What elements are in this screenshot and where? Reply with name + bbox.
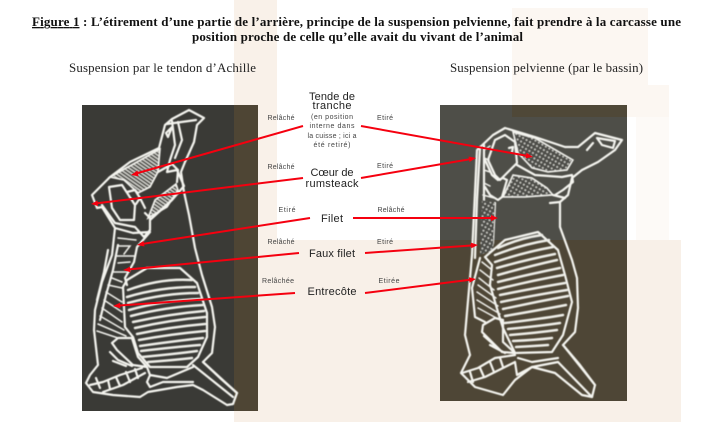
- label: Tende de tranche: été retiré): [314, 142, 350, 149]
- arrow: Tende de tranche to left carcass: [131, 126, 303, 176]
- hindquarter muscles: [110, 149, 160, 193]
- label: Cœur de rumsteack: [306, 167, 359, 190]
- heading: left column: Suspension par le tendon d’Achille: [69, 61, 256, 75]
- label: Tende de tranche: tranche: [312, 100, 352, 112]
- state labels: right column: Relâché: [378, 207, 405, 214]
- state labels: right column: [377, 115, 405, 285]
- arrow: Entrecôte to right carcass: [365, 277, 476, 293]
- forequarter and shank: [462, 318, 595, 397]
- state labels: right column: Etiré: [377, 239, 393, 246]
- state labels: left column: Etiré: [278, 207, 296, 214]
- label: Cœur de rumsteack: Cœur de: [310, 167, 354, 179]
- heading: right column: Suspension pelvienne (par le bassin): [450, 61, 643, 75]
- label: Tende de tranche: [308, 91, 357, 149]
- arrow: Filet to left carcass: [137, 218, 310, 246]
- spine: [475, 145, 495, 258]
- label: Tende de tranche: Tende de: [309, 91, 355, 103]
- label: Cœur de rumsteack: rumsteack: [306, 178, 359, 190]
- title: position proche de celle qu’elle avait du vivant de l’animal: [192, 29, 523, 44]
- arrow: Cœur de rumsteack to right carcass: [361, 156, 476, 178]
- state labels: left column: Relâchée: [262, 278, 294, 285]
- hind bones and inner lines: [102, 120, 196, 237]
- arrow: Faux filet to left carcass: [123, 253, 299, 272]
- carcass outline: [461, 128, 622, 397]
- label: Tende de tranche: la cuisse ; ici a: [308, 133, 357, 140]
- ribs: [495, 235, 568, 347]
- arrow: Faux filet to right carcass: [365, 243, 478, 253]
- rib cage: [472, 232, 572, 353]
- panel: left carcass, Achilles tendon suspension: [82, 105, 258, 411]
- carcass outline: [86, 110, 237, 405]
- state labels: right column: Etiré: [377, 163, 393, 170]
- state labels: right column: Etirée: [378, 278, 400, 285]
- state labels: left column: Relâché: [268, 115, 295, 122]
- state labels: left column: [262, 115, 296, 285]
- label: Entrecôte: Entrecôte: [308, 286, 356, 298]
- ribs: [127, 280, 205, 362]
- arrow: Filet to right carcass: [353, 215, 498, 221]
- label: Filet: Filet: [321, 213, 343, 225]
- hindquarter muscles: [513, 132, 573, 172]
- panel: right carcass, pelvic suspension: [440, 105, 627, 401]
- label: Tende de tranche: (en position: [311, 114, 353, 121]
- arrow: Entrecôte to left carcass: [113, 293, 295, 308]
- background watermark: [234, 0, 681, 422]
- rib cage: [123, 268, 207, 367]
- spine: [97, 228, 150, 320]
- title: [32, 14, 681, 44]
- forequarter and shank: [90, 338, 237, 397]
- label: Faux filet: Faux filet: [309, 248, 355, 260]
- arrow: Cœur de rumsteack to left carcass: [91, 178, 303, 206]
- state labels: left column: Relâché: [268, 239, 295, 246]
- state labels: left column: Relâché: [268, 164, 295, 171]
- arrow: Tende de tranche to right carcass: [361, 126, 533, 158]
- title: Figure 1 : L’étirement d’une partie de l’arrière, principe de la suspension pelvienne, fait prendre à la carcasse une: [32, 14, 681, 29]
- label: Tende de tranche: interne dans: [310, 123, 355, 130]
- hind bones and inner lines: [485, 135, 615, 203]
- state labels: right column: Etiré: [377, 115, 393, 122]
